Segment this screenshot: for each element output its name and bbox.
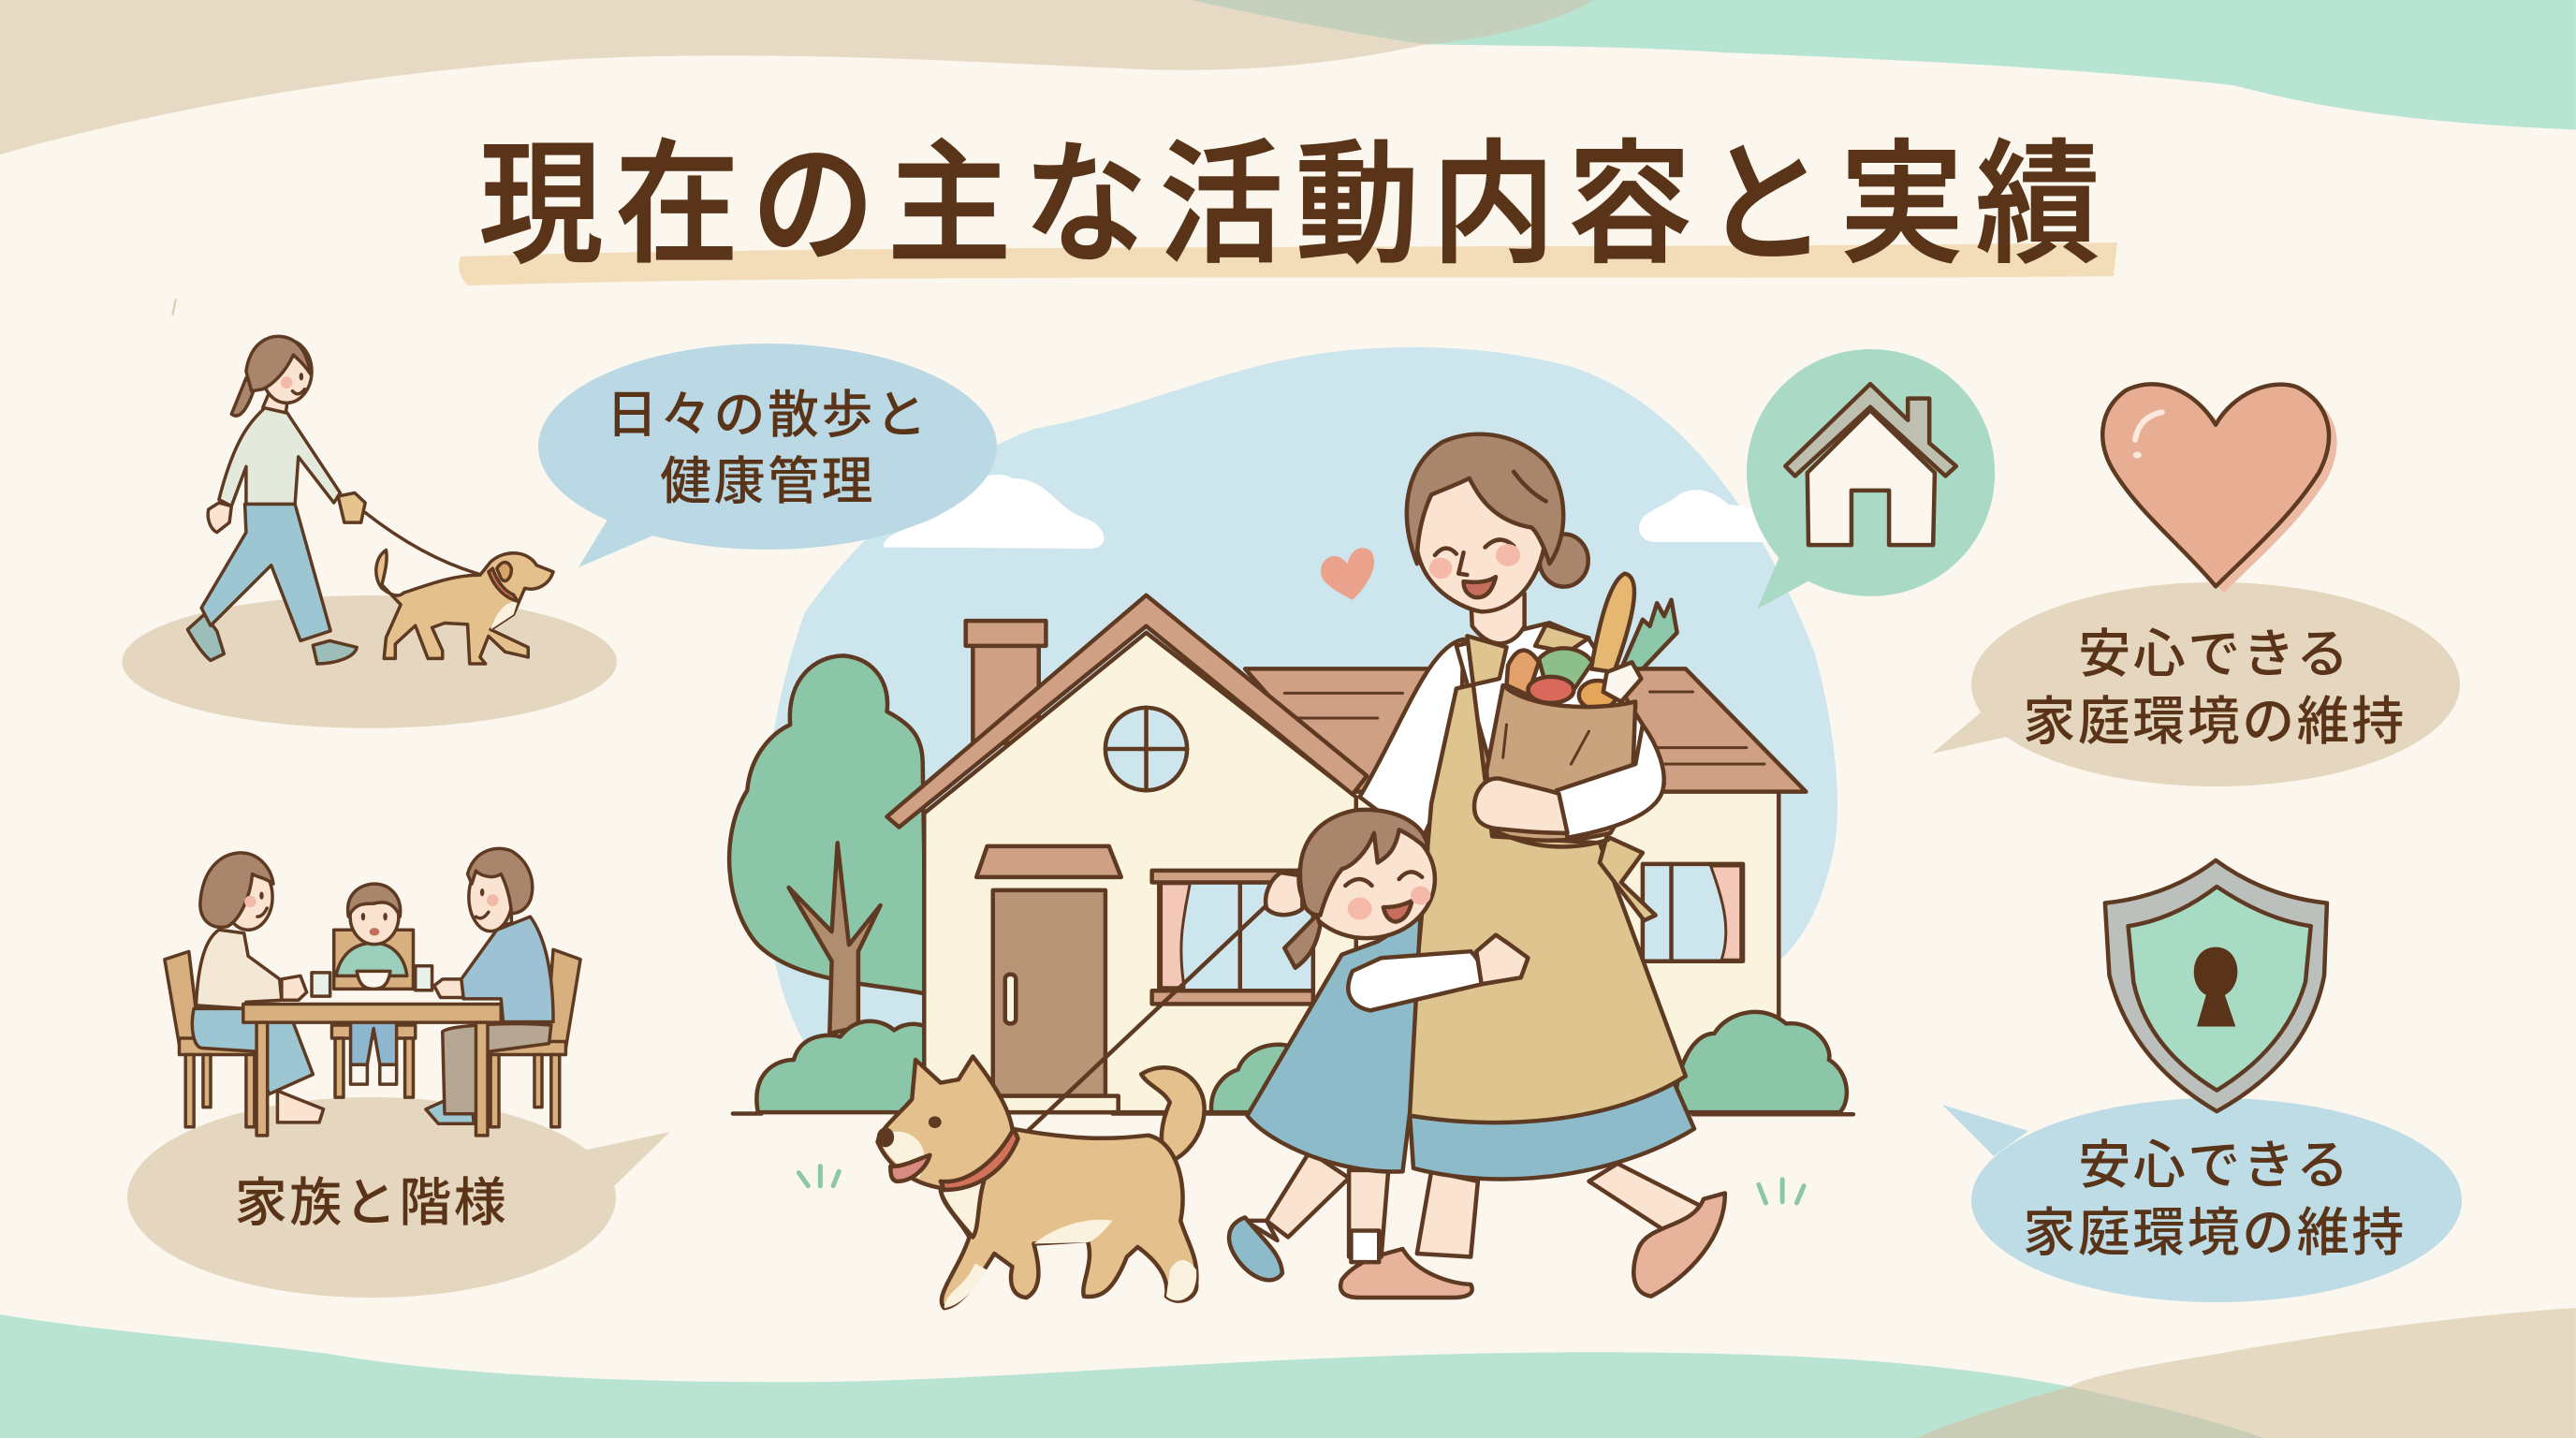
sky blob [764,347,1837,1073]
speech bubble: with family [127,1097,670,1298]
leash [365,513,482,575]
mother's face details [244,891,264,907]
cups [312,966,432,996]
walking scene [122,336,617,728]
small heart [1321,548,1374,600]
house side wing [1245,668,1806,1112]
side window [1643,864,1743,961]
bubble text: daily walks: 日々の散歩と [606,386,929,444]
door with canopy [976,846,1121,1112]
background: top wave shapes [0,0,2576,315]
round window [1105,708,1187,790]
bubble text: tan bubble: 家庭環境の維持 [2023,692,2407,751]
right chair [490,949,580,1127]
bubble text: family: 家族と階様 [235,1173,508,1232]
ground ellipse [122,595,617,728]
tree [729,655,927,1034]
left chair [165,951,255,1127]
table [243,1005,501,1136]
child at table [336,884,407,1084]
house gable [886,595,1367,1112]
title highlight brush stroke [459,242,2117,286]
child chair [331,930,416,1097]
mother cheeks [1429,544,1520,579]
grass ticks [798,1167,1804,1203]
icon: shield with keyhole [2105,860,2327,1111]
background: bottom wave shapes [0,1308,2576,1438]
shiba dog [878,1056,1205,1308]
speech bubble: tan home environment [1932,582,2460,786]
grocery bag with vegetables and holding arm [1474,574,1677,847]
walking dog [376,550,553,664]
clouds [884,475,1800,549]
right and middle bushes [1211,1012,1847,1112]
left bush [756,1021,933,1112]
green speech bubble [1747,349,1995,609]
mother at table [192,853,324,1123]
title: 現在の主な活動内容と実績 [479,131,2100,280]
ground line [733,1111,1853,1116]
dog leash [1027,907,1265,1132]
bubble text: tan bubble: 安心できる [2078,624,2351,683]
bubble text: blue bubble: 安心できる [2078,1136,2351,1195]
speech bubble: daily walks and health [538,344,997,567]
child's face details [361,913,388,936]
icon: house [1785,384,1956,545]
front window [1152,871,1313,1004]
speech bubble: blue home environment [1942,1098,2462,1302]
mother [1340,434,1725,1298]
family dining scene [165,848,580,1136]
father at table [426,848,553,1123]
woman's face details [281,373,303,389]
child cheeks [1348,887,1430,919]
dog eye and nose [877,1116,942,1147]
chimney [966,621,1046,743]
child [1229,810,1528,1280]
father's face details [480,888,499,906]
woman walking [187,336,365,664]
right side icons [1747,349,2337,1111]
icon: heart [2102,384,2337,593]
bubble text: blue bubble: 家庭環境の維持 [2023,1203,2407,1262]
bubble text: daily walks: 健康管理 [660,452,875,510]
central scene: house, family and dog [729,347,1853,1308]
